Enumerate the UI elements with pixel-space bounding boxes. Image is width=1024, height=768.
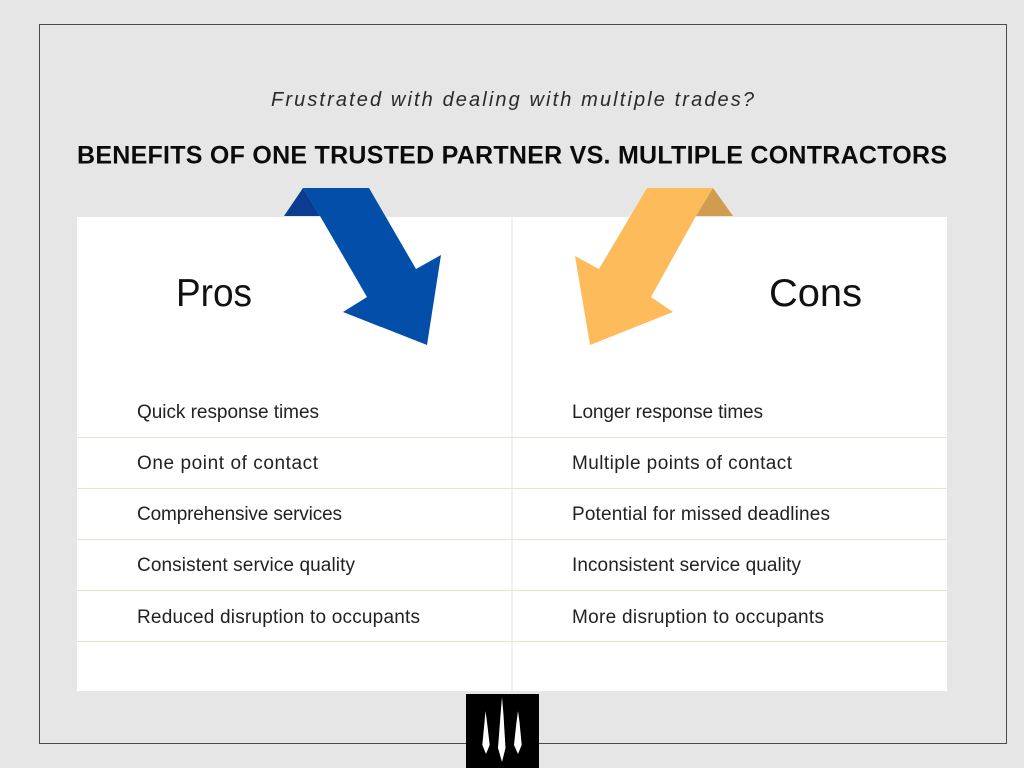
icon: orange arrow pointing to cons <box>575 188 733 345</box>
pro item 3: Comprehensive services <box>137 504 342 525</box>
con item 1: Longer response times <box>572 402 763 423</box>
icon: logo <box>466 694 539 768</box>
icon: blue arrow pointing to pros <box>284 188 441 345</box>
pro item 1: Quick response times <box>137 402 319 423</box>
subtitle: Frustrated with dealing with multiple trades? <box>271 89 755 111</box>
pro item 2: One point of contact <box>137 453 319 474</box>
heading: cons: Cons <box>769 272 862 315</box>
list: cons <box>572 402 830 628</box>
panel: comparison table <box>77 217 947 691</box>
con item 2: Multiple points of contact <box>572 453 793 474</box>
con item 4: Inconsistent service quality <box>572 555 802 576</box>
con item 5: More disruption to occupants <box>572 607 824 628</box>
pro item 5: Reduced disruption to occupants <box>137 607 420 628</box>
pro item 4: Consistent service quality <box>137 555 356 576</box>
con item 3: Potential for missed deadlines <box>572 504 830 525</box>
list: pros <box>137 402 420 628</box>
title: BENEFITS OF ONE TRUSTED PARTNER VS. MULTIPLE CONTRACTORS <box>77 142 947 170</box>
heading: pros: Pros <box>176 272 252 315</box>
